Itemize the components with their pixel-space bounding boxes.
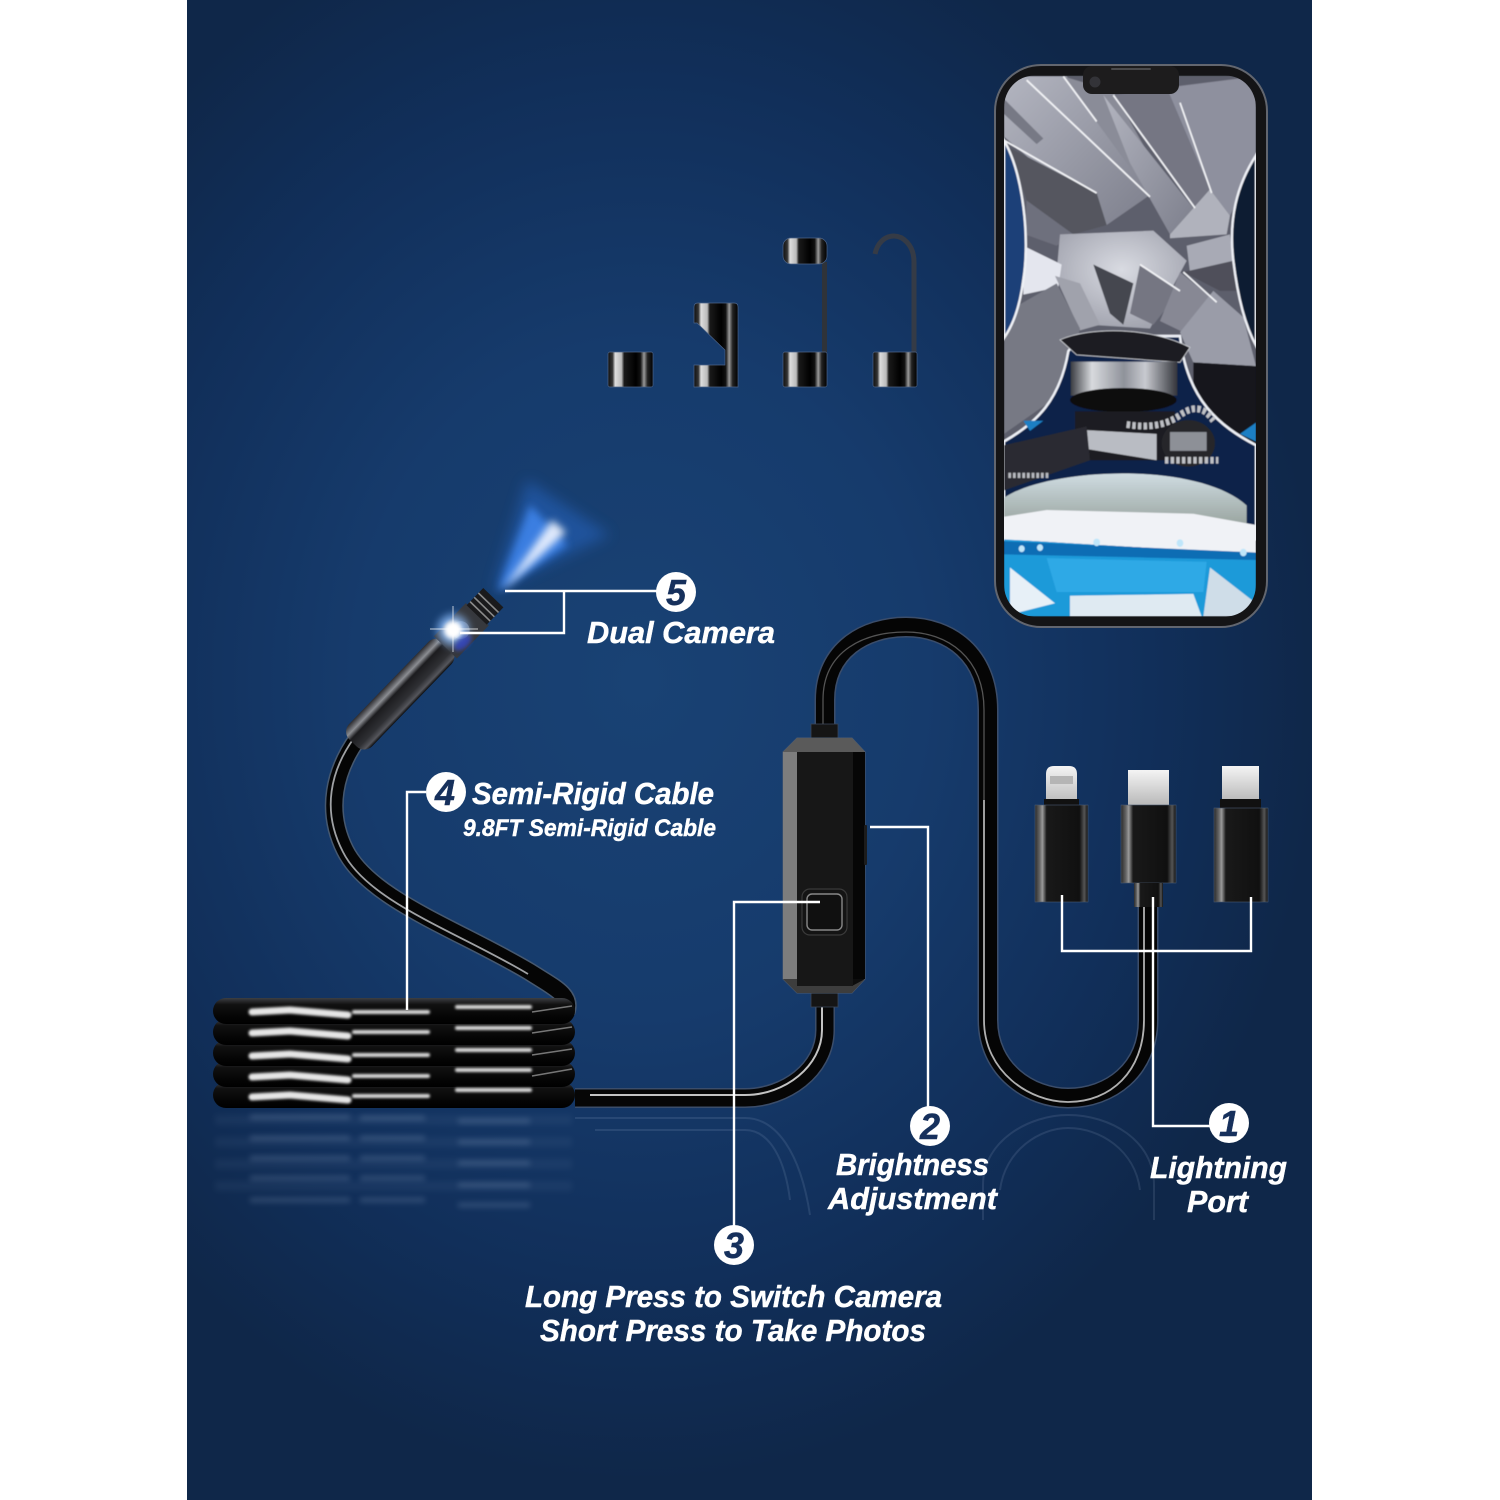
callout 1: lightning port: 1 [1219,1103,1239,1144]
tip: side mirror cap [694,303,738,387]
control box [783,724,867,1007]
callout 4: semi-rigid cable: 4 [434,772,455,813]
lens flare [430,606,478,653]
callout 5: dual camera [460,572,775,650]
main cable to connectors [823,627,1148,1102]
smartphone [995,65,1267,627]
callout 2: brightness adjustment: 2 [919,1106,940,1147]
button [802,889,847,935]
floor reflections [215,1115,1154,1220]
callout 3: switch camera: Short Press to Take Photos [540,1313,926,1348]
callout 1: lightning port: Port [1187,1184,1250,1219]
callout 3: switch camera: Long Press to Switch Camera [525,1279,942,1314]
callout 2: brightness adjustment: Brightness [836,1147,989,1182]
connector: lightning [1035,766,1088,902]
cable from control box to coil [575,1006,825,1098]
coiled cable [213,998,575,1108]
phone notch [1083,66,1179,94]
tip: hook [873,236,917,387]
callout 4: semi-rigid cable: Semi-Rigid Cable [472,776,714,811]
callout 4: semi-rigid cable [407,772,716,1010]
callout 5: dual camera: Dual Camera [587,615,775,650]
callout 4: semi-rigid cable: 9.8FT Semi-Rigid Cable [463,815,716,842]
probe tips set [608,236,917,387]
tip: magnet with stem [783,238,827,387]
cable from probe to coil [331,738,567,1012]
callout 2: brightness adjustment [827,827,999,1216]
callout 5: dual camera: 5 [666,572,687,613]
callout 1: lightning port: Lightning [1150,1150,1287,1185]
background panel [187,0,1312,1500]
callout 1: lightning port [1062,895,1287,1219]
light beam [493,480,610,592]
connector: USB-C [1121,770,1176,907]
callout 3: switch camera: 3 [724,1225,744,1266]
connector: micro USB [1214,766,1268,902]
tip: plain cap [608,352,653,387]
callout 3: switch camera [525,902,942,1348]
phone screen image [1004,76,1256,616]
callout 2: brightness adjustment: Adjustment [827,1181,999,1216]
camera probe head [341,587,505,754]
